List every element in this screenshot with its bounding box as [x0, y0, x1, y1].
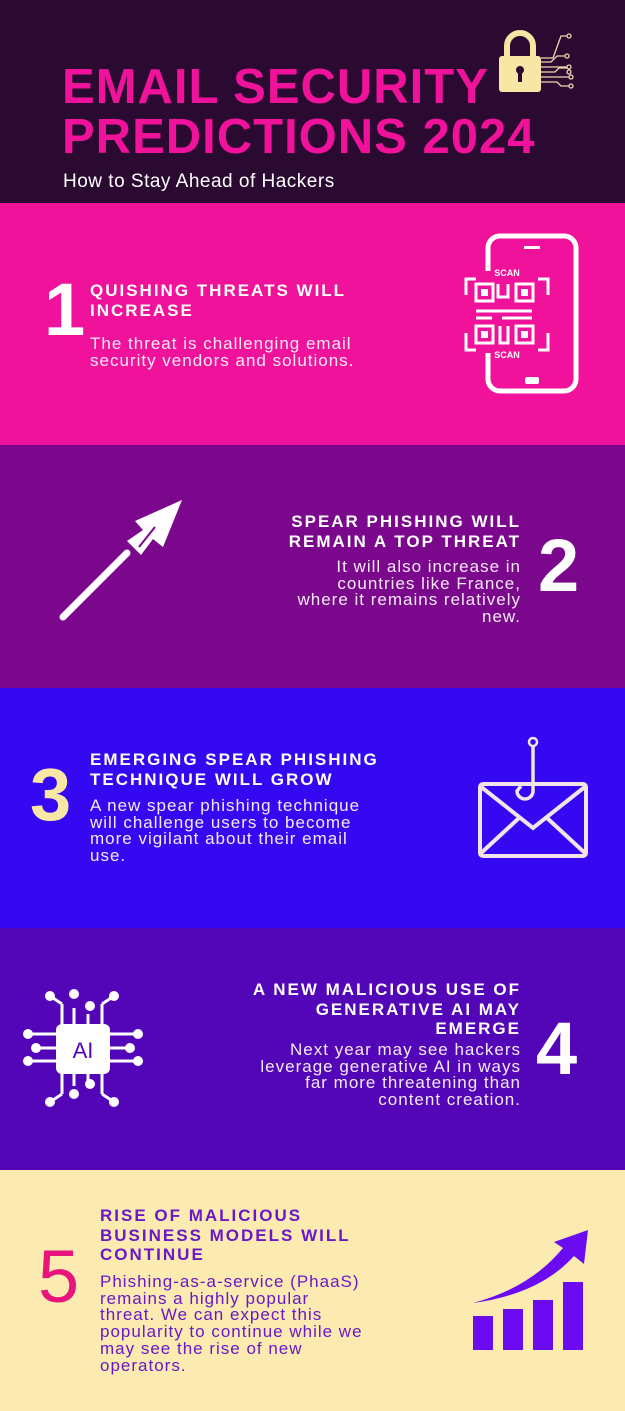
text 3: use. [90, 846, 126, 865]
number 1: 1 [44, 268, 85, 351]
text 3: more vigilant about their email [90, 829, 348, 848]
text 1 [90, 334, 354, 370]
heading 5: CONTINUE [100, 1245, 205, 1264]
heading 5: RISE OF MALICIOUS [100, 1206, 302, 1225]
text 5: may see the rise of new [100, 1339, 303, 1358]
text 2: where it remains relatively [297, 590, 521, 609]
number 4: 4 [536, 1007, 577, 1090]
text 4: content creation. [378, 1090, 521, 1109]
number 3: 3 [30, 753, 71, 836]
heading 3: TECHNIQUE WILL GROW [90, 770, 334, 788]
text 5: remains a highly popular [100, 1289, 309, 1308]
text 3: will challenge users to become [90, 813, 352, 832]
heading 5 [100, 1206, 351, 1264]
text 1: security vendors and solutions. [90, 351, 354, 370]
heading 3: EMERGING SPEAR PHISHING [90, 750, 379, 769]
text 5: Phishing-as-a-service (PhaaS) [100, 1272, 360, 1291]
panel 1: quishing [0, 203, 625, 445]
heading 1: QUISHING THREATS WILL [90, 281, 346, 300]
text 2: It will also increase in [336, 557, 521, 576]
text 2: new. [482, 607, 521, 626]
text 5: threat. We can expect this [100, 1305, 322, 1324]
title [62, 60, 536, 164]
heading 1: INCREASE [90, 300, 194, 320]
text 3 [90, 796, 360, 865]
heading 5: BUSINESS MODELS WILL [100, 1226, 351, 1244]
icon: AI chip [23, 989, 143, 1107]
header panel [0, 0, 625, 203]
text 5: operators. [100, 1356, 187, 1375]
subtitle: How to Stay Ahead of Hackers [63, 171, 335, 192]
text 2: countries like France, [337, 574, 521, 593]
panel 5: malicious business models [0, 1170, 625, 1411]
number 5: 5 [38, 1235, 79, 1318]
text 5 [100, 1272, 363, 1375]
text 4 [260, 1040, 521, 1109]
icon: spear [60, 500, 182, 620]
text 3: A new spear phishing technique [90, 796, 360, 815]
icon: growth chart [473, 1230, 588, 1350]
icon: phone QR [464, 234, 578, 394]
icon: AI chip: AI [73, 1038, 93, 1063]
heading 1 [90, 281, 346, 320]
panel 2: spear phishing [0, 445, 625, 688]
heading 3 [90, 750, 379, 788]
text 2 [297, 557, 521, 626]
text 4: leverage generative AI in ways [260, 1057, 521, 1076]
title: PREDICTIONS 2024 [62, 110, 536, 164]
text 5: popularity to continue while we [100, 1322, 363, 1341]
text 1: The threat is challenging email [90, 334, 352, 353]
icon: padlock [499, 30, 574, 92]
icon: phone QR: SCAN [494, 350, 520, 360]
text 4: Next year may see hackers [290, 1040, 521, 1059]
heading 4 [253, 980, 521, 1038]
heading 4: A NEW MALICIOUS USE OF [253, 980, 521, 999]
text 4: far more threatening than [305, 1073, 521, 1092]
heading 4: GENERATIVE AI MAY [316, 1000, 521, 1018]
number 2: 2 [538, 524, 579, 607]
title: EMAIL SECURITY [62, 60, 489, 114]
heading 2 [289, 512, 521, 550]
panel 3: emerging technique [0, 688, 625, 928]
heading 4: EMERGE [435, 1019, 521, 1038]
icon: phone QR: SCAN [494, 268, 520, 278]
panel 4: generative AI [0, 928, 625, 1170]
heading 2: REMAIN A TOP THREAT [289, 532, 521, 550]
heading 2: SPEAR PHISHING WILL [291, 512, 521, 531]
icon: envelope with hook [478, 736, 588, 858]
